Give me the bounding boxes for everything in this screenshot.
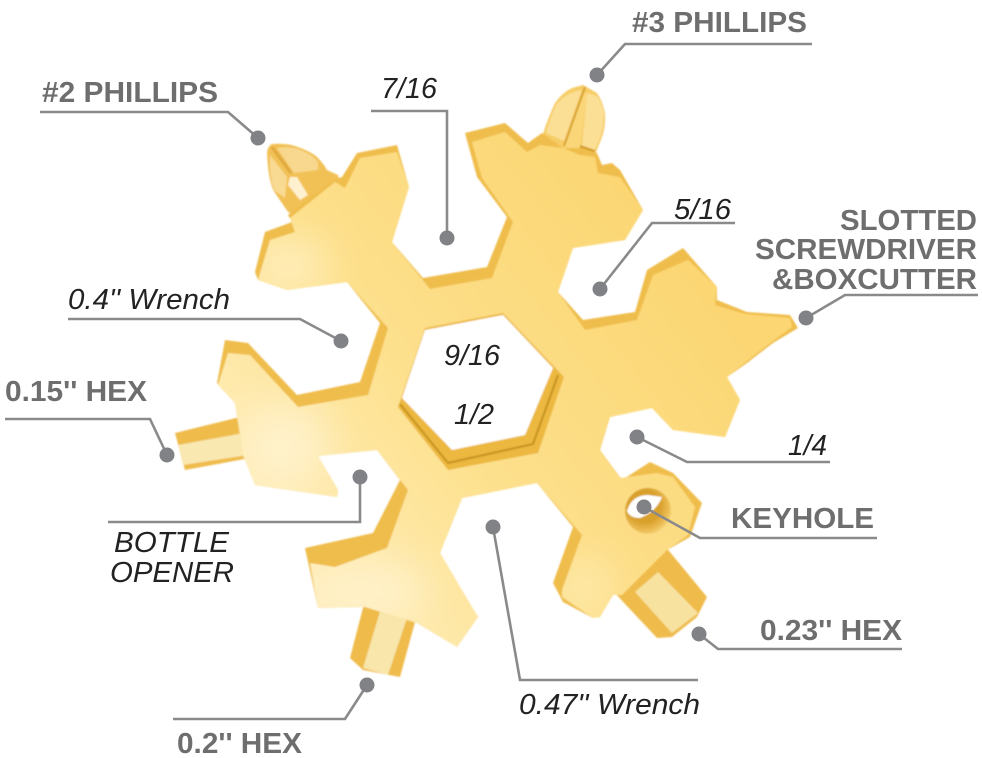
callout: keyhole: KEYHOLE [731, 503, 874, 535]
callout: 7/16: 7/16 [381, 73, 438, 105]
icon: #2 Phillips bit [267, 144, 340, 214]
label: 9/16: 9/16 [444, 340, 501, 372]
callout: 1/4: 1/4 [788, 430, 827, 462]
callout: bottle opener: OPENER [110, 557, 234, 589]
callout: 0.4 wrench [68, 284, 348, 348]
centre hex opening [398, 313, 564, 470]
callout: 0.23 hex: 0.23'' HEX [760, 615, 903, 647]
callout: 1/4 [630, 430, 830, 462]
callout: #3 Phillips: #3 PHILLIPS [632, 7, 807, 39]
callout: slotted screwdriver and boxcutter: &BOXCUTTER [772, 264, 977, 296]
callout: 0.47 wrench [486, 520, 700, 721]
callout: 0.2 hex [173, 678, 374, 758]
callout: #2 Phillips: #2 PHILLIPS [42, 77, 218, 109]
icon: 0.2 hex bit [350, 600, 417, 677]
callout: keyhole [636, 500, 877, 538]
snowflake multi-tool [175, 85, 820, 677]
callout: bottle opener: BOTTLE [114, 527, 230, 559]
callout: #2 Phillips [40, 77, 266, 146]
icon: 0.23 hex bit [612, 540, 707, 638]
icon: #3 Phillips bit [543, 85, 605, 156]
callout: bottle opener [108, 470, 368, 589]
label: 1/2: 1/2 [454, 399, 494, 431]
callout: #3 Phillips [590, 7, 812, 82]
icon: 0.15 hex bit [175, 417, 250, 470]
callout: slotted screwdriver and boxcutter [755, 205, 978, 326]
callout: 0.15 hex [5, 376, 174, 462]
callout: 0.15 hex: 0.15'' HEX [5, 376, 148, 408]
callout: slotted screwdriver and boxcutter: SCREWDRIVER [755, 234, 977, 266]
callout: 0.4 wrench: 0.4'' Wrench [68, 284, 230, 316]
callout: slotted screwdriver and boxcutter: SLOTTED [840, 205, 977, 237]
body front face [218, 132, 792, 648]
callout: 5/16 [592, 194, 735, 296]
callout: 0.47 wrench: 0.47'' Wrench [519, 689, 700, 721]
keyhole [625, 488, 671, 534]
callout: 0.23 hex [692, 615, 903, 649]
callout: 7/16 [371, 73, 454, 246]
callout: 5/16: 5/16 [674, 194, 732, 226]
body side edge [217, 123, 798, 647]
